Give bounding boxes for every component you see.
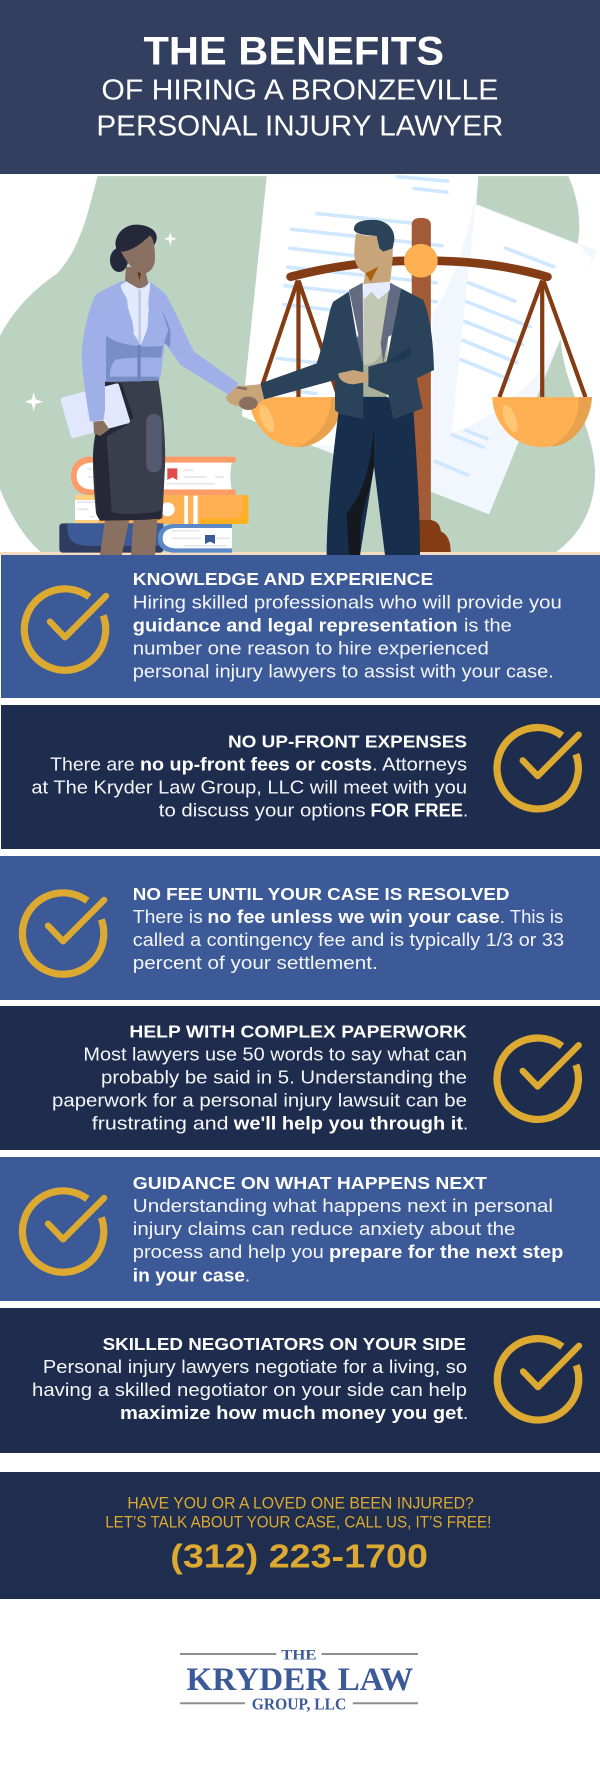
text block: no fee unless we win your case xyxy=(207,907,500,927)
panel: knowledge and experience xyxy=(1,555,600,698)
text block: probably be said in 5. Understanding the xyxy=(101,1066,467,1087)
text block: FOR FREE xyxy=(370,800,463,820)
panel: skilled negotiators on your side xyxy=(0,1308,600,1453)
text block: GUIDANCE ON WHAT HAPPENS NEXT xyxy=(133,1173,487,1193)
text block xyxy=(133,884,564,973)
text block xyxy=(133,1173,563,1285)
man figure and handshake xyxy=(226,220,434,555)
text block: . xyxy=(245,1264,250,1285)
title: THE BENEFITS xyxy=(144,30,444,74)
text block: . xyxy=(463,799,468,820)
text block: There are xyxy=(50,753,135,774)
text block: guidance and legal representation xyxy=(133,616,458,636)
text block: process and help you xyxy=(133,1241,324,1262)
panel: help with complex paperwork xyxy=(0,1006,600,1150)
text block: we'll help you through it xyxy=(233,1113,463,1133)
sparkles xyxy=(25,232,177,411)
text block xyxy=(133,569,562,682)
text block: to discuss your options xyxy=(159,799,366,820)
text block: KNOWLEDGE AND EXPERIENCE xyxy=(133,569,433,589)
text block: . This is xyxy=(500,906,563,927)
text block xyxy=(52,1021,468,1133)
document pages xyxy=(242,176,597,514)
logo: The Kryder Law Group, LLC: KRYDER LAW xyxy=(186,1662,413,1698)
woman figure xyxy=(61,225,238,555)
text block: Understanding what happens next in personal xyxy=(133,1195,553,1216)
text block: . xyxy=(463,1402,468,1423)
panel: guidance on what happens next xyxy=(0,1157,600,1301)
green background blob xyxy=(0,176,595,553)
scales of justice xyxy=(249,218,592,553)
call to action text: HAVE YOU OR A LOVED ONE BEEN INJURED? xyxy=(127,1495,474,1513)
stack of books xyxy=(59,457,248,553)
title: OF HIRING A BRONZEVILLE xyxy=(101,74,498,106)
text block: no up-front fees or costs xyxy=(140,754,372,774)
text block: called a contingency fee and is typically 1/3 or 33 xyxy=(133,929,564,950)
text block: . Attorneys xyxy=(372,753,467,774)
call to action text xyxy=(105,1495,491,1532)
text block: paperwork for a personal injury lawsuit can be xyxy=(52,1089,467,1110)
woman and book stack xyxy=(59,225,248,555)
illustration background, documents and scales xyxy=(0,176,597,553)
logo: The Kryder Law Group, LLC xyxy=(180,1647,418,1713)
text block: at The Kryder Law Group, LLC will meet with you xyxy=(31,776,467,797)
logo: The Kryder Law Group, LLC: GROUP, LLC xyxy=(252,1694,346,1713)
icon: check mark xyxy=(497,1339,579,1420)
text block: having a skilled negotiator on your side can help xyxy=(32,1379,467,1400)
text block: number one reason to hire experienced xyxy=(133,638,489,658)
text block: HELP WITH COMPLEX PAPERWORK xyxy=(129,1021,467,1041)
panel: no up-front expenses xyxy=(1,705,600,849)
text block: SKILLED NEGOTIATORS ON YOUR SIDE xyxy=(103,1334,466,1354)
logo: The Kryder Law Group, LLC: THE xyxy=(281,1647,316,1663)
text block: Personal injury lawyers negotiate for a living, so xyxy=(43,1356,467,1377)
text block: There is xyxy=(133,906,203,927)
phone number: (312) 223-1700 xyxy=(170,1537,428,1574)
ground line xyxy=(0,552,600,555)
title: PERSONAL INJURY LAWYER xyxy=(96,110,503,142)
icon: check mark xyxy=(497,1038,579,1119)
text block xyxy=(31,731,468,820)
text block: Hiring skilled professionals who will provide you xyxy=(133,592,562,612)
icon: check mark xyxy=(22,1191,104,1272)
icon: check mark xyxy=(22,893,104,974)
text block: is the xyxy=(464,614,512,636)
text block: in your case xyxy=(133,1265,245,1285)
icon: check mark xyxy=(24,589,106,670)
text block: . xyxy=(463,1112,468,1133)
text block: prepare for the next step xyxy=(329,1242,563,1262)
text block: maximize how much money you get xyxy=(120,1403,463,1423)
text block xyxy=(32,1334,468,1423)
text block: percent of your settlement. xyxy=(133,952,378,973)
text block: injury claims can reduce anxiety about the xyxy=(133,1218,516,1239)
call to action panel xyxy=(0,1472,600,1599)
text block: frustrating and xyxy=(92,1112,228,1133)
title xyxy=(96,30,503,142)
handshake xyxy=(226,384,264,410)
text block: Most lawyers use 50 words to say what can xyxy=(83,1043,467,1064)
icon: check mark xyxy=(497,728,579,809)
text block: NO FEE UNTIL YOUR CASE IS RESOLVED xyxy=(133,884,509,904)
call to action text: LET’S TALK ABOUT YOUR CASE, CALL US, IT’S FREE! xyxy=(105,1514,491,1532)
header banner xyxy=(0,0,600,174)
panel: no fee until your case is resolved xyxy=(0,856,600,1000)
text block: NO UP-FRONT EXPENSES xyxy=(228,731,467,751)
text block: personal injury lawyers to assist with your case. xyxy=(133,660,554,682)
man figure xyxy=(261,220,434,555)
